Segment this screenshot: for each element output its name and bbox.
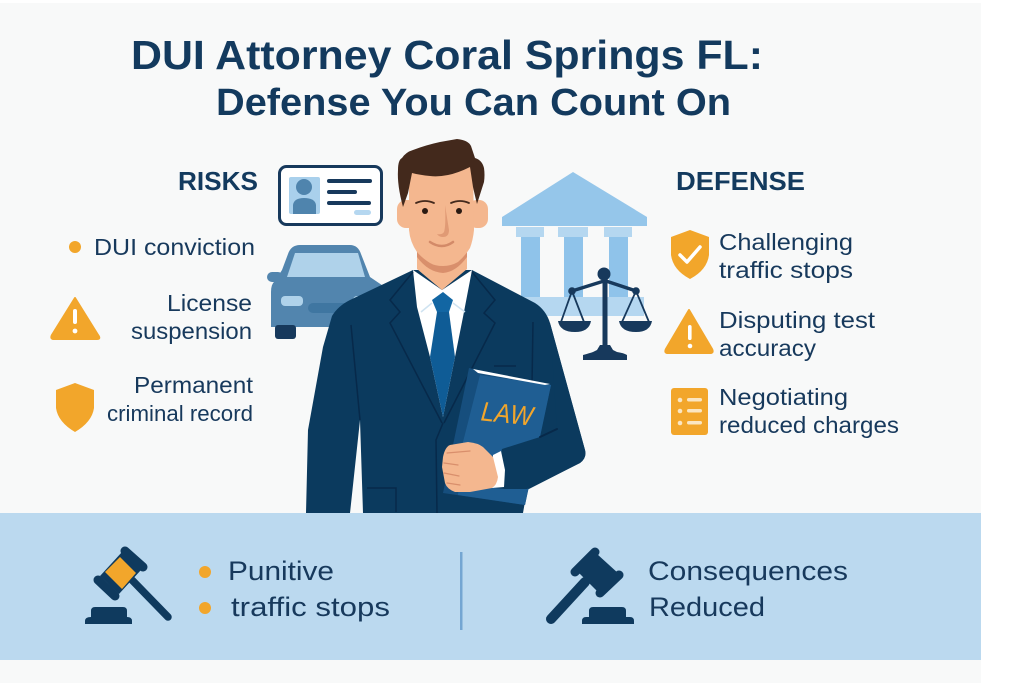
- list: punitive traffic stops: [199, 556, 390, 622]
- heading: defense: DEFENSE: [676, 166, 805, 196]
- icon: gavel with orange band: [85, 551, 168, 624]
- jacket pockets: [367, 366, 516, 512]
- attorney facial features: [416, 201, 469, 246]
- defense item: negotiating reduced charges: reduced charges: [719, 412, 899, 438]
- title: [131, 32, 763, 124]
- heading: risks: RISKS: [178, 166, 258, 196]
- risk item: DUI conviction: DUI conviction: [94, 234, 255, 260]
- jacket: [306, 270, 585, 513]
- law book: LAW: [480, 396, 537, 432]
- title: DUI Attorney Coral Springs FL:: [131, 32, 763, 78]
- defense item: disputing test accuracy: Disputing test: [719, 307, 876, 333]
- attorney neck: [417, 240, 467, 290]
- list: punitive traffic stops: Punitive: [228, 556, 334, 586]
- defense item: challenging traffic stops: Challenging: [719, 229, 853, 255]
- text: consequences reduced: [648, 556, 848, 622]
- icon: gavel: [551, 552, 634, 624]
- jacket lapels: [351, 272, 533, 513]
- shirt cuff: [492, 451, 505, 488]
- icon: scales of justice: [558, 268, 652, 360]
- divider: [460, 552, 462, 630]
- defense item: negotiating reduced charges: Negotiating: [719, 384, 848, 410]
- neck shadow: [417, 250, 467, 273]
- defense item: disputing test accuracy: accuracy: [719, 335, 817, 361]
- panel: bottom band: [0, 513, 981, 660]
- icon: driver license card: [280, 166, 382, 224]
- text: consequences reduced: Consequences: [648, 556, 848, 586]
- risk item: license suspension: License: [167, 290, 252, 316]
- risk item: permanent criminal record: criminal record: [107, 401, 253, 426]
- risk item: license suspension: suspension: [131, 318, 252, 344]
- title: Defense You Can Count On: [216, 82, 731, 124]
- list: punitive traffic stops: traffic stops: [231, 592, 390, 622]
- law book: [443, 368, 551, 505]
- sleeve fold: [540, 429, 557, 437]
- shirt: [413, 270, 472, 417]
- defense item: challenging traffic stops: traffic stops: [719, 257, 853, 283]
- attorney hair: [398, 139, 484, 207]
- text: consequences reduced: Reduced: [649, 592, 765, 622]
- attorney ears: [397, 200, 488, 228]
- panel: defense: [665, 166, 899, 438]
- risk item: license suspension: [51, 290, 252, 344]
- illustration: attorney: [306, 139, 585, 513]
- defense item: challenging traffic stops: [671, 229, 853, 283]
- defense item: disputing test accuracy: [665, 307, 876, 361]
- hand: [442, 442, 498, 492]
- risk item: permanent criminal record: [56, 372, 254, 432]
- risk item: permanent criminal record: Permanent: [134, 372, 254, 398]
- shirt collar shading: [421, 303, 465, 312]
- jacket sleeve: [494, 323, 585, 489]
- attorney face: [409, 165, 474, 266]
- icon: car: [267, 245, 392, 339]
- icon: courthouse: [502, 172, 647, 316]
- tie: [430, 292, 455, 417]
- panel: risks: [51, 166, 258, 432]
- defense item: negotiating reduced charges: [671, 384, 899, 438]
